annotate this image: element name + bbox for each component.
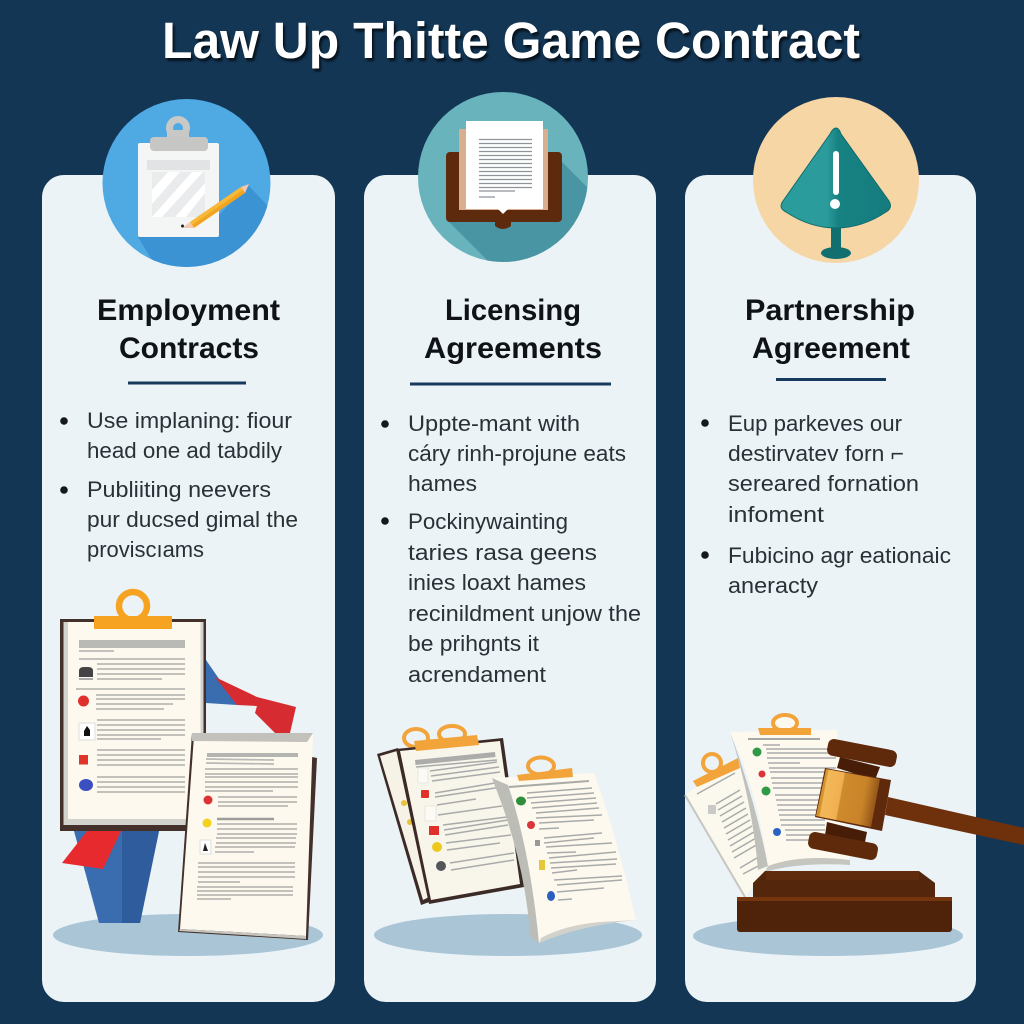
- icon: open book with document: [418, 92, 588, 262]
- bullet list: [381, 411, 641, 687]
- bullet list: Eup parkeves our: [728, 411, 902, 436]
- panel background: [685, 175, 976, 1002]
- icon: warning cone: [753, 97, 919, 263]
- bullet list: proviscıams: [87, 537, 204, 562]
- panel: employment contracts: [42, 99, 335, 1002]
- bullet list: Uppte-mant with: [408, 411, 580, 436]
- divider: [776, 378, 886, 381]
- bullet list: Fubicino agr eationaic: [728, 543, 951, 568]
- bullet list: taries rasa geens: [408, 540, 597, 565]
- bullet list: Use implaning: fiour: [87, 408, 292, 433]
- heading: Agreements: [424, 332, 602, 365]
- bullet list: [701, 411, 951, 598]
- heading: Agreement: [752, 332, 910, 365]
- bullet list: sereared fornation: [728, 471, 919, 496]
- divider: [410, 382, 611, 386]
- bullet list: be prihgnts it: [408, 631, 539, 656]
- heading: Licensing: [445, 294, 581, 327]
- heading: Employment: [97, 294, 280, 327]
- heading: [745, 294, 915, 365]
- illustration: clipboards and ribbon: [53, 592, 323, 956]
- heading: [424, 294, 602, 365]
- bullet list: aneracty: [728, 573, 818, 598]
- bullet list: head one ad tabdily: [87, 438, 282, 463]
- bullet list: recinildment unjow the: [408, 601, 641, 626]
- bullet list: Publiiting neevers: [87, 477, 271, 502]
- panel: partnership agreement: [685, 97, 1024, 1002]
- bullet list: hames: [408, 471, 477, 496]
- divider: [128, 382, 246, 384]
- heading: [97, 294, 280, 365]
- bullet list: Pockinywainting: [408, 509, 568, 534]
- bullet list: inies loaxt hames: [408, 570, 586, 595]
- title: Law Up Thitte Game Contract: [162, 12, 860, 69]
- bullet list: [60, 408, 298, 562]
- panel background: [364, 175, 656, 1002]
- bullet list: destirvatev forn ⌐: [728, 441, 904, 466]
- heading: Contracts: [119, 332, 259, 365]
- heading: Partnership: [745, 294, 915, 327]
- bullet list: infoment: [728, 502, 824, 527]
- bullet list: pur ducsed gimal the: [87, 507, 298, 532]
- bullet list: cáry rinh-projune eats: [408, 441, 626, 466]
- illustration: contracts and gavel: [685, 715, 1024, 956]
- bullet list: acrendament: [408, 662, 546, 687]
- panel background: [42, 175, 335, 1002]
- icon: clipboard and pencil: [102, 99, 270, 267]
- illustration: stacked clipboards and curled page: [374, 726, 642, 956]
- panel: licensing agreements: [364, 92, 656, 1002]
